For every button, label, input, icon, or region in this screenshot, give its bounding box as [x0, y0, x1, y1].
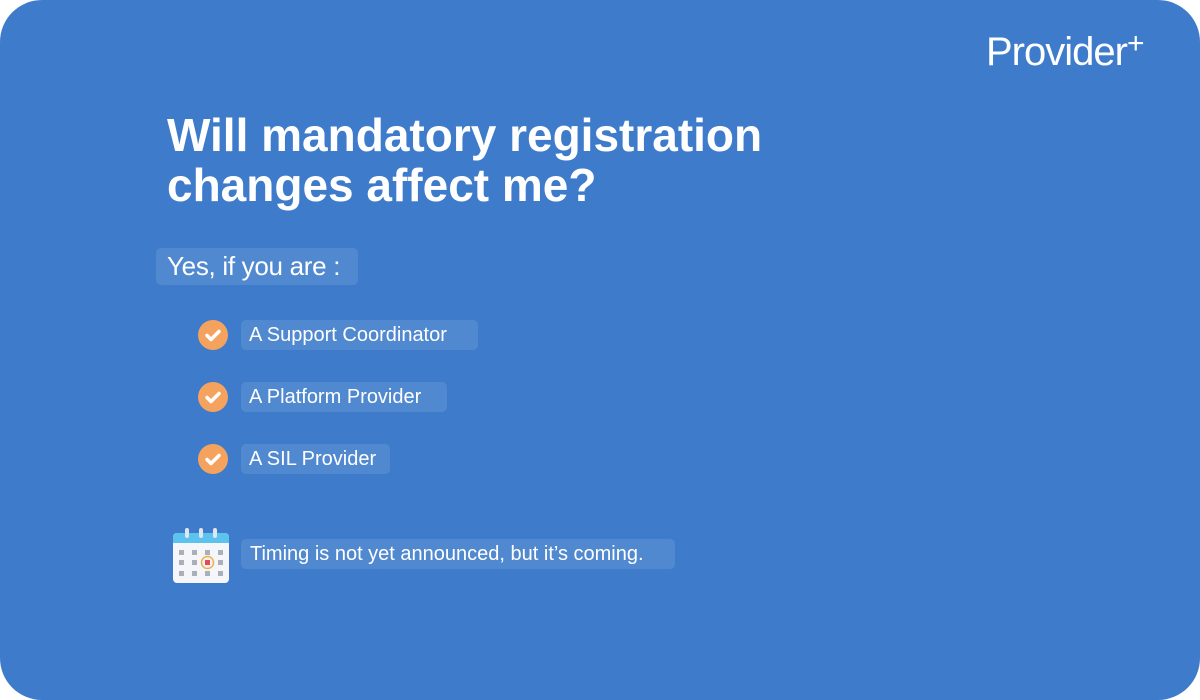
- icon: check: [198, 444, 228, 474]
- label: A SIL Provider: [249, 448, 376, 470]
- list item: Platform Provider: [198, 382, 447, 412]
- icon: check: [198, 320, 228, 350]
- title: [167, 109, 762, 211]
- label: A Platform Provider: [249, 386, 421, 408]
- list item: Support Coordinator: [198, 320, 478, 350]
- label: [241, 320, 478, 350]
- label: A Support Coordinator: [249, 324, 447, 346]
- label: [241, 444, 390, 474]
- logo: Provider+: [986, 27, 1143, 74]
- subheading pill: Yes, if you are :: [167, 251, 340, 281]
- subheading pill: [156, 248, 358, 285]
- list item: SIL Provider: [198, 444, 390, 474]
- label: [241, 382, 447, 412]
- title: changes affect me?: [167, 159, 596, 211]
- timing note: [241, 539, 675, 569]
- title: Will mandatory registration: [167, 109, 762, 161]
- icon: calendar: [173, 528, 229, 583]
- timing note: Timing is not yet announced, but it’s coming.: [250, 543, 644, 565]
- icon: check: [198, 382, 228, 412]
